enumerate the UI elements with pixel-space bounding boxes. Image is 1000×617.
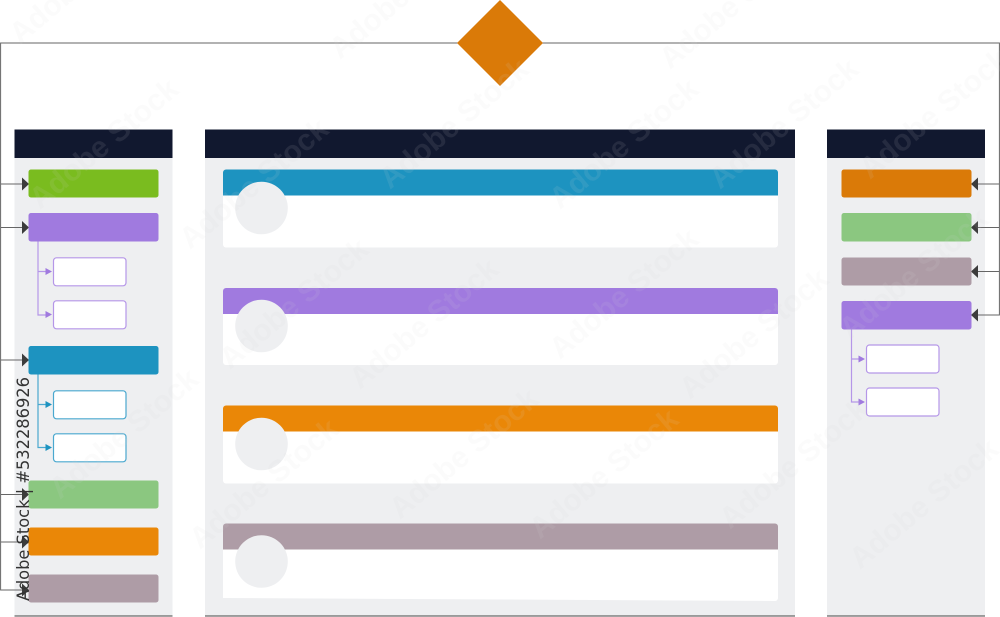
arrowheads: left inputs: [22, 178, 29, 596]
right item: orange: [842, 170, 972, 198]
watermark pattern: Adobe Stock: [173, 112, 335, 255]
watermark pattern: Adobe Stock: [343, 252, 505, 395]
left item: blue with children: [28, 346, 158, 462]
icon: orange diamond: [457, 0, 543, 86]
right item: green: [842, 213, 972, 242]
card: blue: [223, 170, 778, 248]
watermark pattern: Adobe Stock: [183, 412, 345, 555]
watermark pattern: Adobe Stock: [373, 52, 535, 195]
watermark pattern: Adobe Stock: [43, 362, 205, 505]
panel: center column: [205, 130, 795, 616]
left item: orange: [28, 528, 158, 556]
watermark pattern: Adobe Stock: [23, 72, 185, 215]
panel: right column: [827, 130, 985, 616]
watermark pattern: Adobe Stock: [543, 72, 705, 215]
right item: mauve: [842, 258, 972, 286]
left item: light green: [28, 480, 158, 508]
watermark pattern: Adobe Stock: [703, 52, 865, 195]
card: purple: [223, 288, 778, 365]
watermark pattern: Adobe Stock: [833, 202, 995, 345]
stock id label: Adobe Stock | #532286926: [14, 377, 33, 601]
watermark pattern: Adobe Stock: [213, 232, 375, 375]
right item: purple with children: [842, 301, 972, 416]
arrowheads: right inputs: [971, 178, 978, 322]
watermark pattern: Adobe Stock: [673, 262, 835, 405]
left item: purple with children: [28, 213, 158, 329]
left item: green: [28, 170, 158, 198]
watermark pattern: Adobe Stock: [543, 222, 705, 365]
card: orange: [223, 406, 778, 484]
panel: left column: [14, 130, 172, 616]
watermark pattern: Adobe Stock: [383, 382, 545, 525]
card: mauve: [223, 524, 778, 601]
watermark pattern: Adobe Stock: [713, 392, 875, 535]
watermark pattern: Adobe Stock: [523, 402, 685, 545]
left item: mauve: [28, 574, 158, 602]
